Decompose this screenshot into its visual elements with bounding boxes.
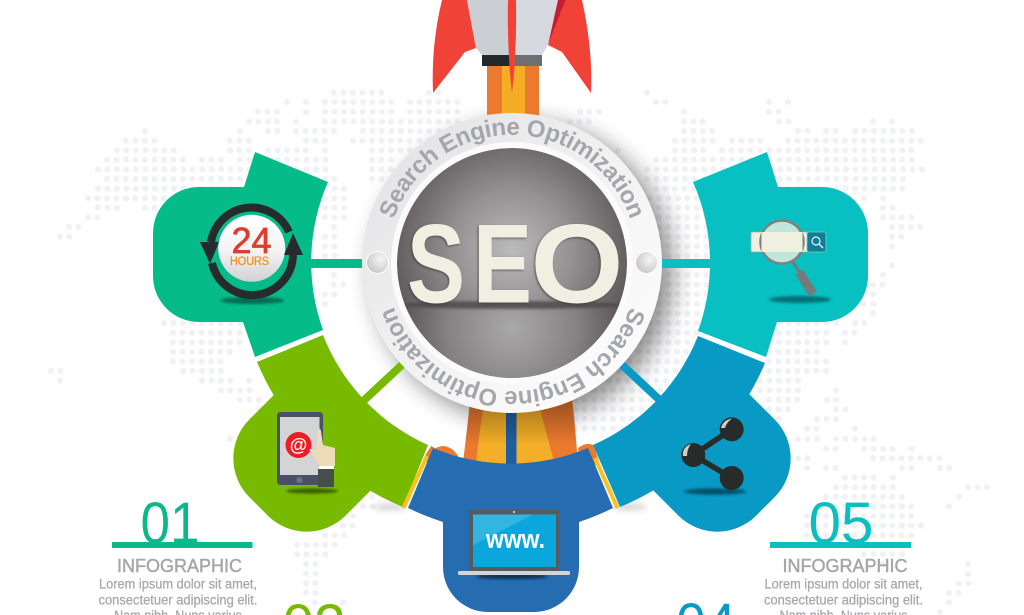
panel: step 05 cyan segment bbox=[693, 152, 868, 357]
connector: teal right bbox=[658, 259, 718, 268]
text block: step 01: 01 bbox=[140, 491, 200, 556]
connector: blue bbox=[620, 363, 664, 404]
icon: share nodes bbox=[681, 417, 746, 495]
right bolt bbox=[636, 252, 658, 274]
left bolt bbox=[366, 252, 388, 274]
text block: step 01 bbox=[98, 491, 258, 615]
rocket lower flame bbox=[425, 395, 600, 470]
text block: step 05: Lorem ipsum dolor sit amet, bbox=[764, 576, 922, 592]
connector: teal left bbox=[305, 259, 365, 268]
text block: step 05: INFOGRAPHIC bbox=[782, 556, 908, 576]
panel: step 04 blue segment bbox=[593, 336, 813, 554]
text block: step 05: consectetuer adipiscing elit. bbox=[764, 592, 923, 608]
panel: step 01 teal segment bbox=[153, 152, 328, 357]
inner white rim bbox=[391, 142, 633, 384]
SEO heading: E bbox=[473, 202, 532, 326]
SEO heading: O bbox=[530, 202, 624, 326]
icon: laptop with www bbox=[458, 510, 570, 579]
curved label: Search Engine Optimization (bottom): Search Engine Optimization bbox=[383, 308, 644, 406]
icon: laptop with www: www. bbox=[485, 524, 545, 554]
icon: tablet with tapping hand: @ bbox=[290, 435, 307, 455]
ring drop shadow bbox=[373, 122, 673, 422]
rocket body and fins bbox=[433, 0, 591, 93]
panel: step 02 green segment bbox=[211, 335, 428, 554]
icon: 24 hours clock: HOURS bbox=[230, 256, 269, 268]
text block: step 05: 05 bbox=[808, 491, 874, 556]
panel: step 03 blue segment bbox=[408, 448, 613, 612]
rocket upper flame bbox=[487, 64, 539, 120]
icon: magnifier over search bar bbox=[751, 220, 831, 303]
text block: step 05 bbox=[764, 491, 923, 615]
metal disc bbox=[390, 148, 634, 383]
icon: tablet with tapping hand bbox=[277, 412, 338, 494]
text block: step 01: consectetuer adipiscing elit. bbox=[98, 592, 258, 608]
text block: step 01: Lorem ipsum dolor sit amet, bbox=[99, 576, 257, 592]
world map dot background bbox=[51, 93, 988, 612]
icon: 24 hours clock: 24 bbox=[231, 220, 272, 261]
gear soft shadows bbox=[373, 503, 647, 511]
text block: step 01: INFOGRAPHIC bbox=[117, 556, 242, 576]
outer ring bbox=[362, 113, 662, 413]
central SEO badge bbox=[362, 113, 662, 413]
curved label: Search Engine Optimization (top): Search Engine Optimization bbox=[380, 120, 641, 218]
yellow divider strips bbox=[404, 447, 618, 508]
icon: 24 hours clock bbox=[200, 208, 303, 304]
connector: green bbox=[360, 363, 404, 404]
SEO heading: S bbox=[407, 202, 465, 326]
